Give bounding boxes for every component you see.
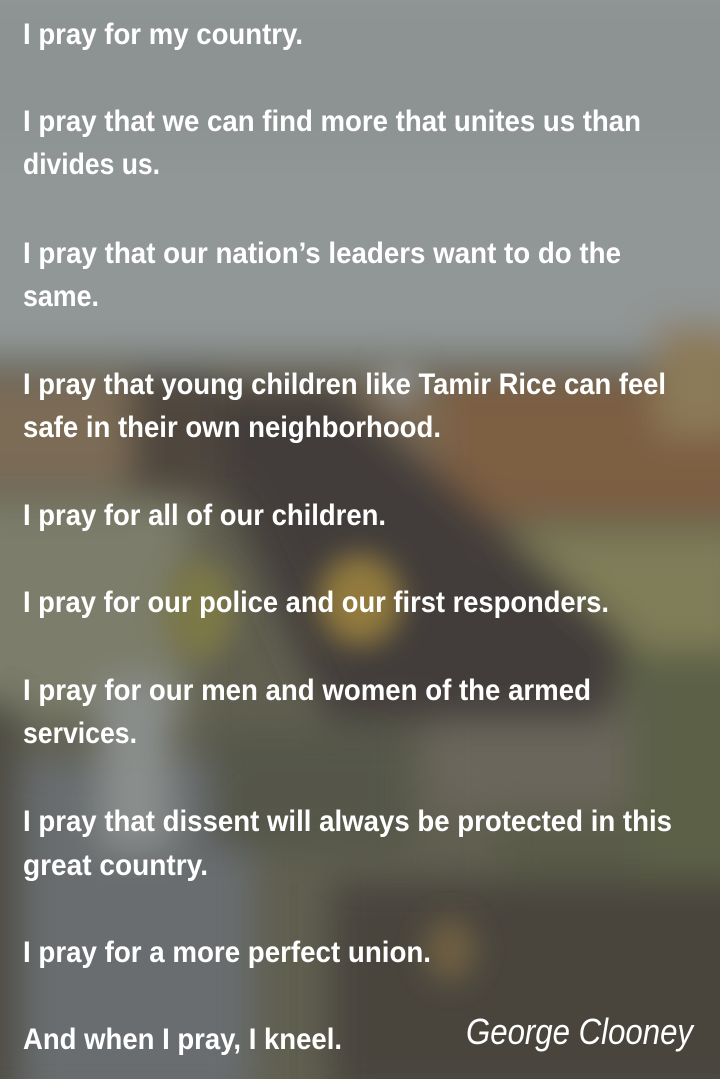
line: my country: I pray for my country. xyxy=(23,18,303,51)
stanza: nation's leaders: I pray that our nation’s leaders want to do the xyxy=(23,237,621,270)
stanza: unites us xyxy=(23,105,641,181)
stanza: unites us: divides us. xyxy=(23,148,160,181)
stanza: armed services: I pray for our men and women of the armed xyxy=(23,674,591,707)
stanza: nation's leaders xyxy=(23,237,621,313)
stanza: Tamir Rice: I pray that young children like Tamir Rice can feel xyxy=(23,368,666,401)
stanza: Tamir Rice: safe in their own neighborhood. xyxy=(23,411,441,444)
stanza: dissent: I pray that dissent will always be protected in this xyxy=(23,805,672,838)
stanza: Tamir Rice xyxy=(23,368,666,444)
line: kneel: And when I pray, I kneel. xyxy=(23,1023,342,1056)
line: police and first responders: I pray for our police and our first responders. xyxy=(23,586,609,619)
line: all of our children: I pray for all of our children. xyxy=(23,499,386,532)
stanza: dissent: great country. xyxy=(23,849,208,882)
line: perfect union: I pray for a more perfect union. xyxy=(23,936,431,969)
stanza: dissent xyxy=(23,805,672,882)
stanza: armed services: services. xyxy=(23,717,137,750)
stanza: armed services xyxy=(23,674,591,750)
stanza: nation's leaders: same. xyxy=(23,280,99,313)
stanza: unites us: I pray that we can find more that unites us than xyxy=(23,105,641,138)
